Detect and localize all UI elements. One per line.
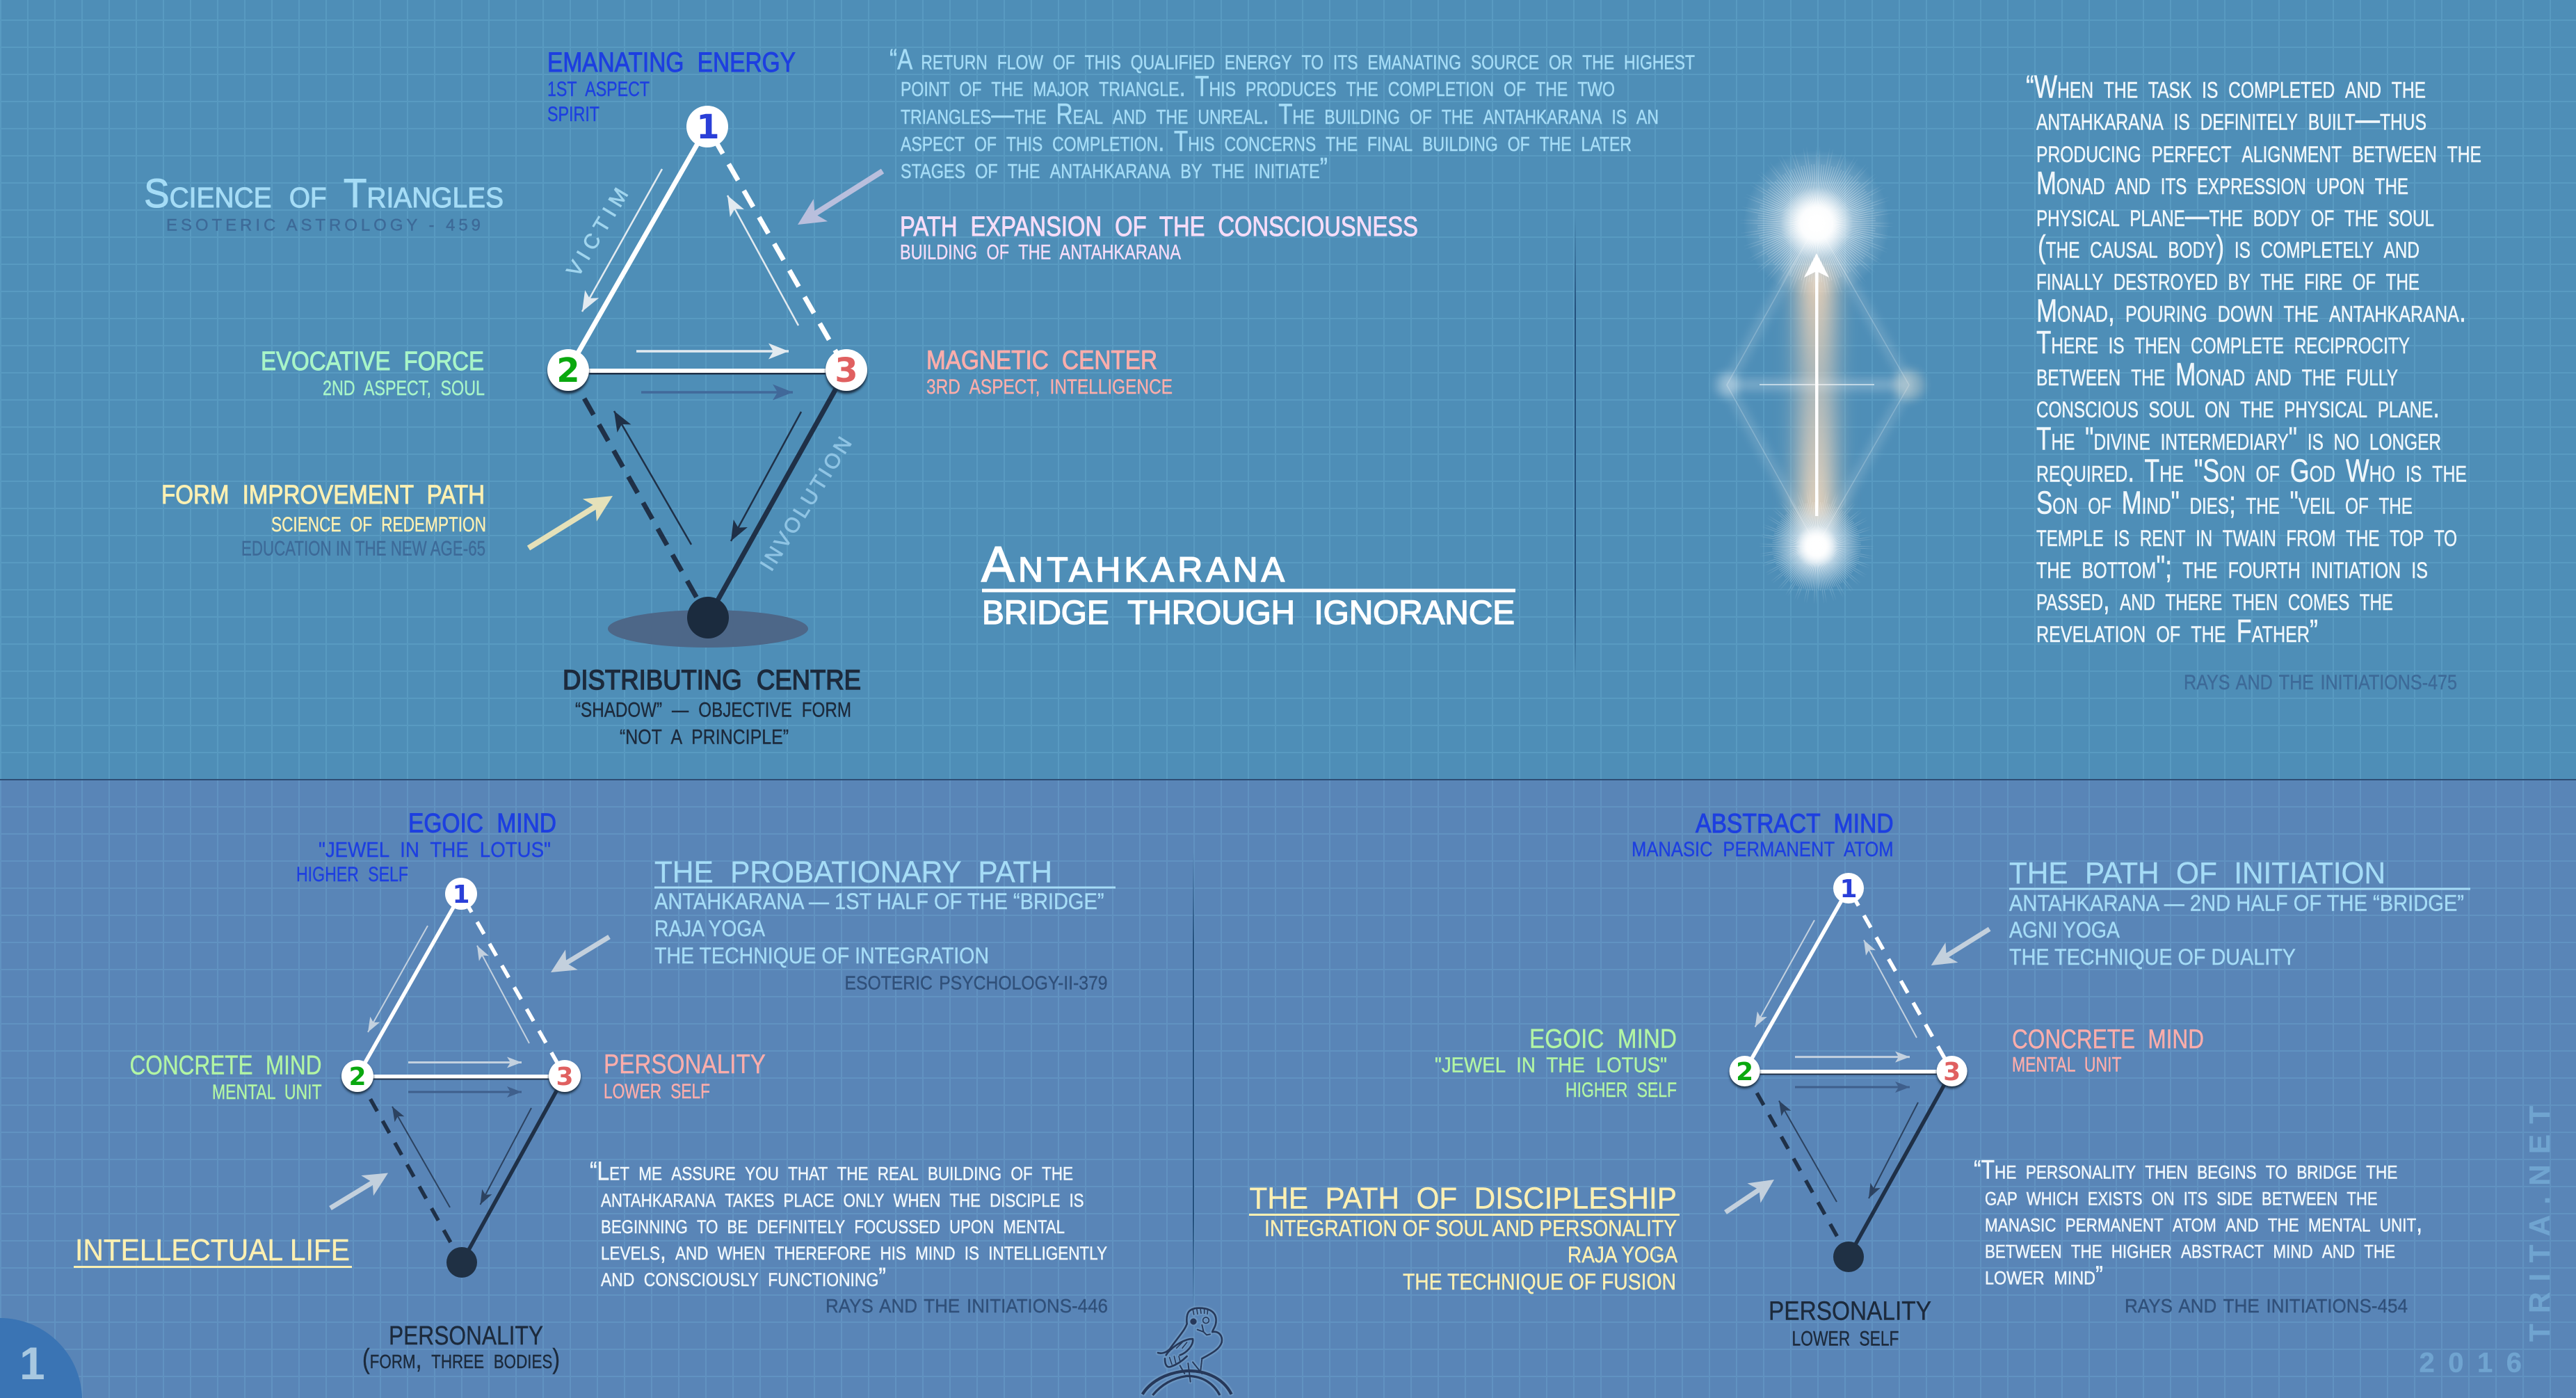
label: egoic mind <box>296 809 556 886</box>
label: concrete mind pink: CONCRETE MIND <box>2012 1025 2204 1054</box>
heading: path of discipleship: THE TECHNIQUE OF FUSION <box>1403 1269 1676 1294</box>
arrow: up to 1 <box>477 946 529 1043</box>
quote: return flow: triangles—the Real and the unreal. The building of the antahkarana is an <box>901 97 1659 130</box>
heading: probationary path: ESOTERIC PSYCHOLOGY-II-379 <box>844 972 1107 993</box>
node 1: 1 <box>452 881 470 909</box>
heading: path of discipleship: RAJA YOGA <box>1568 1242 1678 1267</box>
quote: when the task is completed <box>2026 68 2481 649</box>
quote: the personality then begins: between the higher abstract mind and the <box>1985 1235 2395 1264</box>
node 1: 1 <box>1840 875 1858 903</box>
quote: return flow: stages of the antahkarana by the initiate” <box>901 152 1328 184</box>
quote: when the task is completed: finally destroyed by the fire of the <box>2036 261 2420 297</box>
heading: path of initiation: AGNI YOGA <box>2009 917 2120 942</box>
label: INVOLUTION: INVOLUTION <box>756 433 857 575</box>
quote: let me assure you: beginning to be definitely focussed upon mental <box>601 1210 1065 1239</box>
label: magnetic center: 3RD ASPECT, INTELLIGENCE <box>926 376 1173 399</box>
arrow: horizontal blue <box>641 391 793 394</box>
label: form improvement path: SCIENCE OF REDEMPTION <box>271 513 486 536</box>
label: personality pink <box>604 1050 766 1103</box>
heading: science of triangles: ESOTERIC ASTROLOGY - 459 <box>166 216 481 235</box>
heading: probationary path <box>654 855 1116 993</box>
quote: when the task is completed: the bottom"; the fourth initiation is <box>2036 549 2428 585</box>
icon: page number badge <box>0 1318 82 1398</box>
arrow: horizontal light <box>1795 1056 1910 1058</box>
label: concrete mind <box>129 1051 321 1104</box>
line: dashed dark 2 to 4 <box>1745 1071 1849 1257</box>
citation: rays 446: RAYS AND THE INITIATIONS-446 <box>826 1295 1108 1317</box>
label: distributing centre <box>563 665 861 748</box>
node 2: 2 <box>1736 1058 1753 1086</box>
label: personality dark: PERSONALITY <box>389 1321 543 1351</box>
diagram: main antahkarana diamond <box>529 106 883 648</box>
heading: probationary path: THE TECHNIQUE OF INTEGRATION <box>654 943 989 968</box>
node 3 <box>549 1060 581 1094</box>
arrow: down to 2 <box>368 926 428 1032</box>
quote: when the task is completed: There is then complete reciprocity <box>2036 324 2410 360</box>
diagram: initiation diamond <box>1725 873 1990 1272</box>
watermark: trita.net: TRITA.NET <box>2523 1106 2556 1342</box>
label: egoic mind: HIGHER SELF <box>296 863 408 886</box>
arrow: gray pointer lower <box>330 1173 388 1208</box>
node 2 <box>341 1060 373 1094</box>
arrow: white upward <box>1804 253 1829 516</box>
line: white 2 to 3 <box>568 369 846 374</box>
label: concrete mind: MENTAL UNIT <box>212 1081 321 1104</box>
heading: probationary path: RAJA YOGA <box>654 916 766 941</box>
quote: when the task is completed: “When the task is completed and the <box>2026 68 2426 104</box>
quote: let me assure you: antahkarana takes place only when the disciple is <box>601 1184 1084 1213</box>
heading: path of discipleship <box>1249 1182 1680 1294</box>
heading: path of discipleship: THE PATH OF DISCIPLESHIP <box>1249 1182 1677 1216</box>
label: form improvement path <box>161 481 486 561</box>
arrow: gray pointer lower <box>1725 1180 1774 1212</box>
label: distributing centre: “SHADOW” — OBJECTIVE FORM <box>575 699 851 722</box>
node 3: 3 <box>835 351 858 390</box>
node 4 dark <box>1833 1242 1864 1272</box>
node 3 <box>826 349 867 394</box>
citation: rays 454: RAYS AND THE INITIATIONS-454 <box>2125 1295 2408 1317</box>
arrow: up to 1 <box>727 195 798 326</box>
quote: when the task is completed: passed, and there then comes the <box>2036 581 2393 617</box>
quote: when the task is completed: conscious soul on the physical plane. <box>2036 388 2440 424</box>
quote: return flow: “A return flow of this qualified energy to its emanating source or the highest <box>889 43 1695 75</box>
label: abstract mind <box>1632 809 1894 861</box>
label: path expansion <box>900 211 1418 264</box>
label: magnetic center <box>926 346 1173 399</box>
node 2 <box>547 349 589 394</box>
heading: science of triangles <box>144 171 504 235</box>
quote: return flow: aspect of this completion. This concerns the final building of the later <box>901 124 1632 157</box>
label: personality pink: LOWER SELF <box>604 1080 710 1103</box>
quote: the personality then begins <box>1974 1155 2422 1291</box>
line: dashed white 1 to 3 <box>1849 888 1952 1071</box>
arrow: yellow pointer <box>529 496 613 548</box>
arrow: dark down <box>1869 1102 1918 1198</box>
quote: let me assure you <box>590 1157 1107 1292</box>
label: abstract mind: ABSTRACT MIND <box>1696 809 1894 839</box>
icon: owl on ring <box>1143 1308 1232 1395</box>
label: path expansion: PATH EXPANSION OF THE CONSCIOUSNESS <box>900 211 1418 242</box>
label: form improvement path: EDUCATION IN THE NEW AGE-65 <box>241 537 485 561</box>
label: concrete mind pink <box>2012 1025 2204 1077</box>
label: egoic mind green: HIGHER SELF <box>1565 1079 1677 1102</box>
label: concrete mind pink: MENTAL UNIT <box>2012 1054 2121 1077</box>
label: magnetic center: MAGNETIC CENTER <box>926 346 1157 376</box>
arrow: up to 1 <box>1864 940 1917 1038</box>
label: personality lower self: PERSONALITY <box>1769 1297 1931 1326</box>
quote: when the task is completed: between the Monad and the fully <box>2036 356 2398 392</box>
arrow: gray pointer upper <box>1931 929 1990 965</box>
arrow: down to 2 <box>582 169 662 312</box>
label: form improvement path: FORM IMPROVEMENT PATH <box>161 481 485 510</box>
label: personality dark: (form, three bodies) <box>362 1344 560 1374</box>
label: personality lower self <box>1769 1297 1931 1351</box>
diagram: probationary diamond <box>330 878 609 1278</box>
quote: when the task is completed: Son of Mind" dies; the "veil of the <box>2036 485 2413 521</box>
label: egoic mind green <box>1435 1024 1677 1102</box>
heading: path of discipleship: INTEGRATION OF SOUL AND PERSONALITY <box>1264 1216 1677 1241</box>
heading: science of triangles: Science of Triangles <box>144 171 504 216</box>
line: dashed dark 2 to 4 <box>357 1076 462 1262</box>
label: emanating energy: SPIRIT <box>547 103 599 126</box>
arrow: up to 2 dark <box>614 411 691 545</box>
node 1 <box>1833 873 1864 903</box>
node 4 dark <box>446 1247 477 1278</box>
label: egoic mind: "JEWEL IN THE LOTUS" <box>319 837 551 862</box>
arrow: gray pointer upper <box>551 937 609 972</box>
heading: path of initiation: THE TECHNIQUE OF DUALITY <box>2009 945 2296 970</box>
arrow: down to 4 dark <box>731 412 801 541</box>
watermark: year: 2016 <box>2419 1348 2522 1379</box>
quote: when the task is completed: antahkarana is definitely built—thus <box>2036 101 2426 137</box>
node 1 <box>445 878 477 910</box>
node 1: 1 <box>696 108 720 147</box>
heading: path of initiation: ANTAHKARANA — 2ND HALF OF THE “BRIDGE” <box>2009 891 2464 916</box>
line: dashed white 1 to 3 <box>461 894 565 1076</box>
node 2 <box>1730 1056 1760 1088</box>
quote: when the task is completed: revelation of the Father” <box>2036 613 2318 649</box>
panel: top background <box>0 0 2576 780</box>
quote: when the task is completed: required. The "Son of God Who is the <box>2036 453 2467 489</box>
label: personality dark <box>362 1321 560 1374</box>
quote: return flow: point of the major triangle. This produces the completion of the two <box>901 70 1615 102</box>
quote: when the task is completed: The "divine intermediary" is no longer <box>2036 420 2441 456</box>
line: dashed dark 2 to 4 <box>568 370 708 618</box>
label: personality pink: PERSONALITY <box>604 1050 766 1079</box>
illustration: glowing diamond <box>1714 143 1924 606</box>
arrow: horizontal blue <box>408 1091 522 1093</box>
label: evocative force: EVOCATIVE FORCE <box>261 347 484 376</box>
icon: page number badge: 1 <box>19 1337 45 1389</box>
panel: bottom background <box>0 780 2576 1398</box>
line: solid white 1 to 2 <box>357 894 461 1076</box>
shadow ellipse under distributing centre <box>608 610 808 648</box>
label: personality lower self: LOWER SELF <box>1792 1327 1899 1351</box>
label: egoic mind green: "JEWEL IN THE LOTUS" <box>1435 1053 1667 1077</box>
label: evocative force <box>261 347 485 400</box>
line: solid dark 3 to 4 <box>462 1076 565 1262</box>
quote: the personality then begins: “The personality then begins to bridge the <box>1974 1155 2397 1184</box>
heading: intellectual life: INTELLECTUAL LIFE <box>75 1233 350 1267</box>
arrow: horizontal light <box>408 1061 522 1063</box>
quote: the personality then begins: lower mind” <box>1985 1262 2103 1291</box>
arrow: horizontal blue <box>1795 1086 1910 1088</box>
label: distributing centre: DISTRIBUTING CENTRE <box>563 665 861 696</box>
label: path expansion: BUILDING OF THE ANTAHKARANA <box>900 241 1181 264</box>
title: antahkarana: Antahkarana <box>981 537 1285 593</box>
label: egoic mind green: EGOIC MIND <box>1529 1024 1677 1054</box>
node 1 <box>686 106 728 147</box>
quote: let me assure you: “Let me assure you that the real building of the <box>590 1157 1073 1187</box>
label: evocative force: 2ND ASPECT, SOUL <box>323 377 485 400</box>
line: solid white 1 to 2 <box>568 127 707 370</box>
label: distributing centre: “NOT A PRINCIPLE” <box>620 726 789 748</box>
line: solid dark 3 to 4 <box>1849 1071 1952 1257</box>
arrow: dark up to 2 <box>392 1107 450 1207</box>
arrow: dark down <box>480 1108 531 1205</box>
label: abstract mind: MANASIC PERMANENT ATOM <box>1632 838 1894 861</box>
line: solid white 1 to 2 <box>1745 888 1849 1071</box>
heading: path of initiation <box>2009 856 2470 970</box>
quote: return flow <box>889 43 1695 184</box>
arrow: lavender pointer <box>798 171 883 225</box>
arrow: horizontal white <box>636 350 789 353</box>
line: white 2 to 3 <box>1745 1070 1952 1075</box>
label: VICTIM: VICTIM <box>563 184 633 281</box>
node 4 dark <box>687 597 729 638</box>
arrow: down to 2 <box>1755 920 1814 1027</box>
heading: probationary path: THE PROBATIONARY PATH <box>654 855 1052 890</box>
arrow: dark up to 2 <box>1779 1101 1837 1202</box>
quote: when the task is completed: physical plane—the body of the soul <box>2036 197 2434 233</box>
line: solid dark 3 to 4 <box>708 370 846 618</box>
node 3 <box>1937 1056 1967 1088</box>
node 2: 2 <box>556 351 580 390</box>
quote: the personality then begins: gap which exists on its side between the <box>1985 1182 2378 1211</box>
heading: path of initiation: THE PATH OF INITIATION <box>2009 856 2385 890</box>
quote: let me assure you: levels, and when therefore his mind is intelligently <box>601 1237 1107 1266</box>
quote: let me assure you: and consciously functioning” <box>601 1263 886 1292</box>
heading: probationary path: ANTAHKARANA — 1ST HALF OF THE “BRIDGE” <box>654 889 1104 914</box>
quote: when the task is completed: Monad, pouring down the antahkarana. <box>2036 293 2466 329</box>
quote: the personality then begins: manasic permanent atom and the mental unit, <box>1985 1209 2422 1238</box>
title: antahkarana: BRIDGE THROUGH IGNORANCE <box>982 595 1515 632</box>
node 2: 2 <box>348 1063 367 1091</box>
quote: when the task is completed: Monad and its expression upon the <box>2036 165 2408 201</box>
citation: rays 475: RAYS AND THE INITIATIONS-475 <box>2184 671 2457 694</box>
node 3: 3 <box>556 1063 574 1091</box>
node 3: 3 <box>1943 1058 1961 1086</box>
line: dashed white 1 to 3 <box>707 127 846 370</box>
label: emanating energy <box>547 47 796 126</box>
quote: when the task is completed: (the causal body) is completely and <box>2038 228 2420 264</box>
label: emanating energy: 1ST ASPECT <box>547 78 650 101</box>
label: concrete mind: CONCRETE MIND <box>129 1051 321 1081</box>
label: emanating energy: EMANATING ENERGY <box>547 47 796 78</box>
label: egoic mind: EGOIC MIND <box>408 809 556 839</box>
title: antahkarana <box>981 537 1515 632</box>
line: white 2 to 3 <box>357 1075 565 1079</box>
